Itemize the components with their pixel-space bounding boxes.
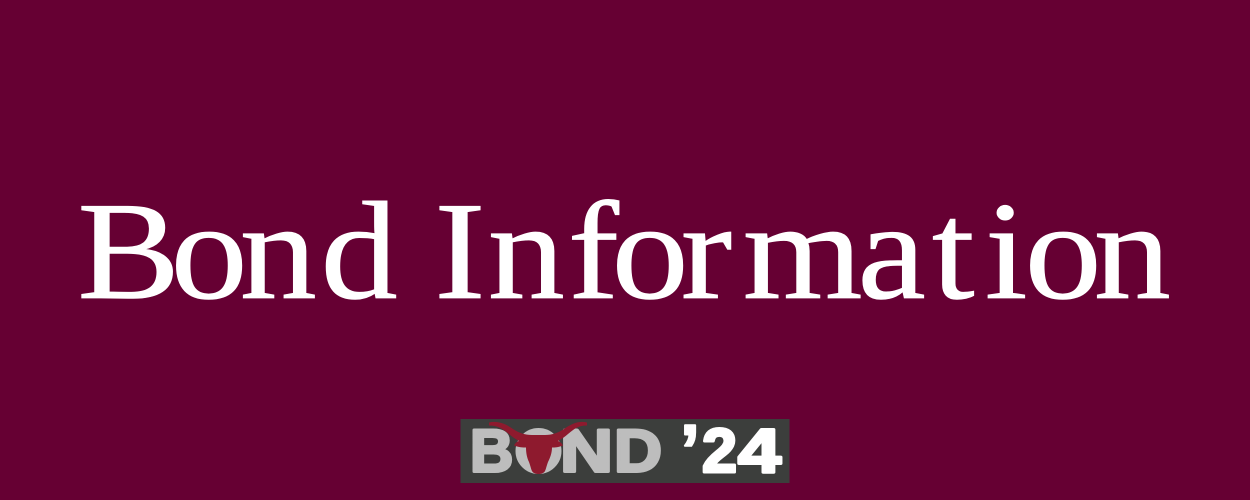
logo year: '24: 4 <box>738 417 782 486</box>
logo year: '24 <box>680 411 782 491</box>
logo letter O circle <box>515 428 562 474</box>
title: Bond Information <box>77 173 1171 328</box>
logo word: BOND: B <box>470 418 513 484</box>
logo word: BOND <box>470 418 662 484</box>
bull horns <box>489 422 587 444</box>
logo year: '24: ’ <box>680 411 700 491</box>
logo: Bond '24 <box>460 411 790 491</box>
logo word: BOND: N <box>560 418 613 484</box>
logo word: BOND: D <box>614 418 662 484</box>
logo year: '24: 2 <box>702 417 737 486</box>
logo background <box>460 419 790 483</box>
bull head <box>514 439 563 474</box>
icon: longhorn bull <box>489 422 587 474</box>
